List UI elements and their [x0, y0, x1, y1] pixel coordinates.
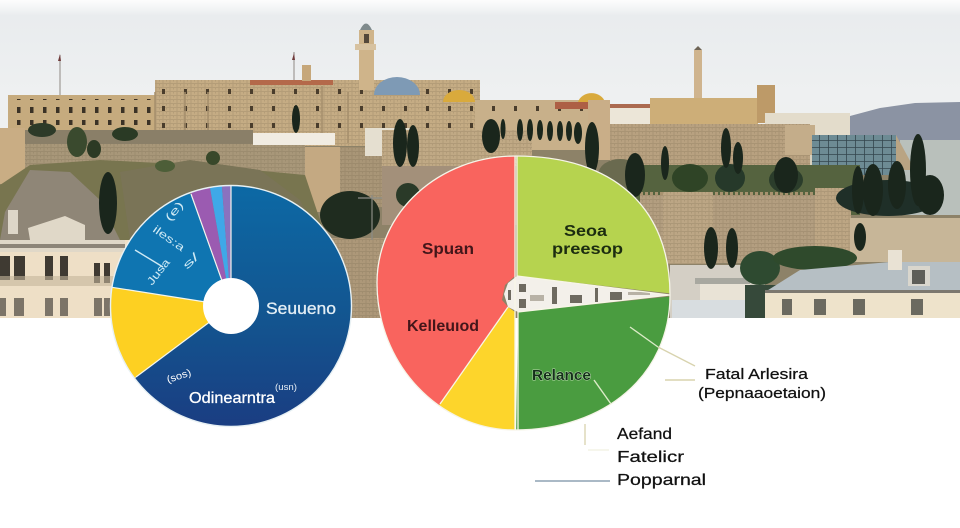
- callout: Fatal Arlesira: [698, 366, 826, 402]
- slice: light blue: [210, 186, 229, 278]
- label: small unit: (usn): [275, 382, 297, 392]
- callout: Fatal Arlesira: Fatal Arlesira: [705, 366, 809, 383]
- slice: lime: [517, 150, 675, 294]
- label: small rotated bracket: (sos): [166, 368, 193, 386]
- label: Seoa: Seoa: [564, 223, 607, 240]
- slice: yellow: [111, 288, 208, 378]
- label: Odinearntra: Odinearntra: [189, 390, 275, 407]
- slice: red: [378, 156, 514, 405]
- legend label: Fatelicr: Fatelicr: [617, 449, 685, 466]
- legend labels: [617, 426, 706, 489]
- slice: yellow: [439, 307, 514, 430]
- photo: hilltop citadel skyline: [0, 0, 960, 318]
- callout sub-label: (Pepnaaoetaion): [698, 385, 826, 402]
- rotated labels in mid blue slice: s/: [181, 250, 203, 272]
- rotated labels in mid blue slice: (e): [163, 199, 186, 224]
- label: preesop: preesop: [552, 241, 623, 258]
- rotated labels in mid blue slice: Jusa: [145, 256, 174, 288]
- donut hole: [203, 278, 259, 334]
- gap: photo glimpse through pie: [504, 276, 670, 312]
- slice: purple: [191, 188, 226, 280]
- slice: green: [516, 296, 670, 430]
- rotated labels in mid blue slice: iles:a: [150, 224, 188, 255]
- slice: violet: [222, 186, 230, 278]
- label: Seuueno: Seuueno: [266, 299, 336, 318]
- rotated labels in mid blue slice: [145, 199, 203, 288]
- left pie chart: [110, 184, 352, 428]
- legend label: Popparnal: Popparnal: [617, 472, 706, 489]
- label: Kelleuiod: Kelleuıod: [407, 318, 479, 335]
- slice: main blue: [136, 186, 351, 426]
- leader lines: [535, 327, 695, 481]
- label: Spuan: Spuan: [422, 241, 474, 258]
- label: Relance: Relance: [532, 367, 591, 384]
- slice: mid blue: [112, 194, 221, 301]
- legend labels: Aefand: [617, 426, 672, 443]
- right pie chart: [370, 150, 675, 440]
